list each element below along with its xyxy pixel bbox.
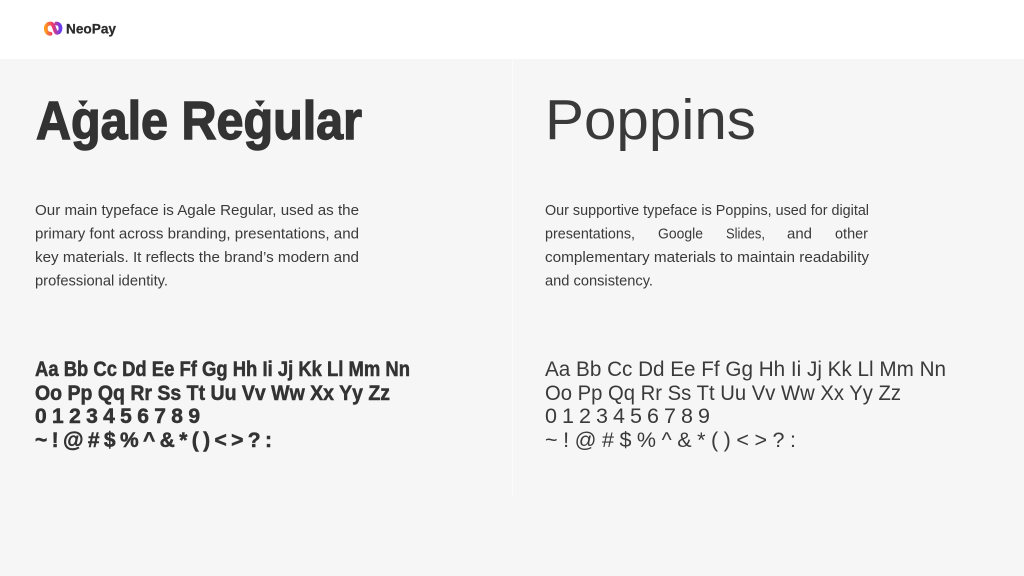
logo wordmark: NeoPay (66, 22, 116, 36)
column divider (512, 59, 513, 496)
character set: Poppins: Aa Bb Cc Dd Ee Ff Gg Hh Ii Jj Kk Ll Mm Nn (545, 357, 946, 381)
heading: Poppins: Poppins (545, 88, 756, 152)
panel: Agale Regular (35, 91, 410, 452)
description: Poppins: Google (658, 226, 703, 242)
character set: Poppins: ~ ! @ # $ % ^ & * ( ) < > ? : (545, 428, 796, 452)
character set: Agale Regular: ~ ! @ # $ % ^ & * ( ) < > ? : (35, 429, 272, 452)
header bar (0, 0, 1024, 59)
character set: Poppins: 0 1 2 3 4 5 6 7 8 9 (545, 404, 710, 428)
description: Poppins: presentations, (545, 226, 635, 242)
description: Poppins: and consistency. (545, 274, 653, 290)
logo: NeoPay (46, 22, 116, 36)
character set: Agale Regular: Aa Bb Cc Dd Ee Ff Gg Hh Ii Jj Kk Ll Mm Nn (35, 358, 410, 381)
character set: Agale Regular: Oo Pp Qq Rr Ss Tt Uu Vv Ww Xx Yy Zz (35, 382, 390, 405)
description: Poppins (545, 203, 870, 290)
description: Agale Regular: primary font across branding, presentations, and (35, 226, 359, 242)
character set: Poppins (545, 357, 946, 452)
description: Agale Regular: Our main typeface is Agale Regular, used as the (35, 203, 359, 219)
icon: NeoPay infinity mark (46, 24, 60, 34)
heading: Agale Regular: Agale Regular (36, 91, 362, 151)
description: Agale Regular: key materials. It reflects the brand’s modern and (35, 250, 359, 266)
description: Poppins: Our supportive typeface is Poppins, used for digital (545, 203, 869, 219)
character set: Agale Regular (35, 358, 410, 452)
character set: Agale Regular: 0 1 2 3 4 5 6 7 8 9 (35, 405, 200, 428)
description: Agale Regular: professional identity. (35, 274, 168, 290)
description: Poppins: and (787, 226, 812, 242)
character set: Poppins: Oo Pp Qq Rr Ss Tt Uu Vv Ww Xx Yy Zz (545, 381, 901, 405)
panel: Poppins (545, 88, 946, 452)
description: Poppins: other (835, 226, 868, 242)
description: Agale Regular (35, 203, 359, 290)
description: Poppins: Slides, (726, 226, 765, 242)
description: Poppins: complementary materials to maintain readability (545, 250, 870, 266)
